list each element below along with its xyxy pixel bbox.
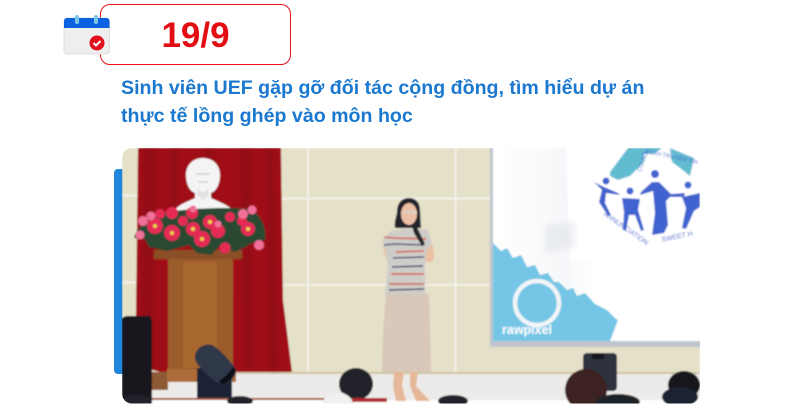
photo: speaker on stage: SWEET H (661, 231, 693, 244)
podium (154, 250, 242, 259)
wall (122, 148, 700, 374)
date box: 19/9 (161, 16, 230, 55)
flowers (134, 208, 265, 255)
date box (100, 4, 291, 65)
photo: speaker on stage: CƠ SỞ (636, 151, 650, 173)
moving light (195, 344, 236, 398)
heading (121, 77, 644, 127)
photo: speaker on stage: ANNUNCIATION (602, 211, 649, 247)
speaker woman (382, 198, 434, 401)
shelter logo (598, 148, 646, 178)
screen (490, 148, 702, 347)
stage speaker (122, 316, 152, 404)
photo: speaker on stage: BTXH TRUYỀN TIN (645, 148, 698, 166)
logo ring (515, 281, 559, 325)
floor (150, 374, 700, 401)
photo: speaker on stage (122, 148, 700, 404)
accent bar (114, 169, 126, 374)
heading: thực tế lồng ghép vào môn học (121, 105, 413, 127)
curtain (135, 148, 292, 372)
audience heads (123, 353, 700, 409)
icon: calendar (64, 15, 110, 54)
photo: speaker on stage: rawpixel (502, 323, 552, 337)
bust (175, 156, 232, 212)
heading: Sinh viên UEF gặp gỡ đối tác cộng đồng, tìm hiểu dự án (121, 77, 644, 99)
